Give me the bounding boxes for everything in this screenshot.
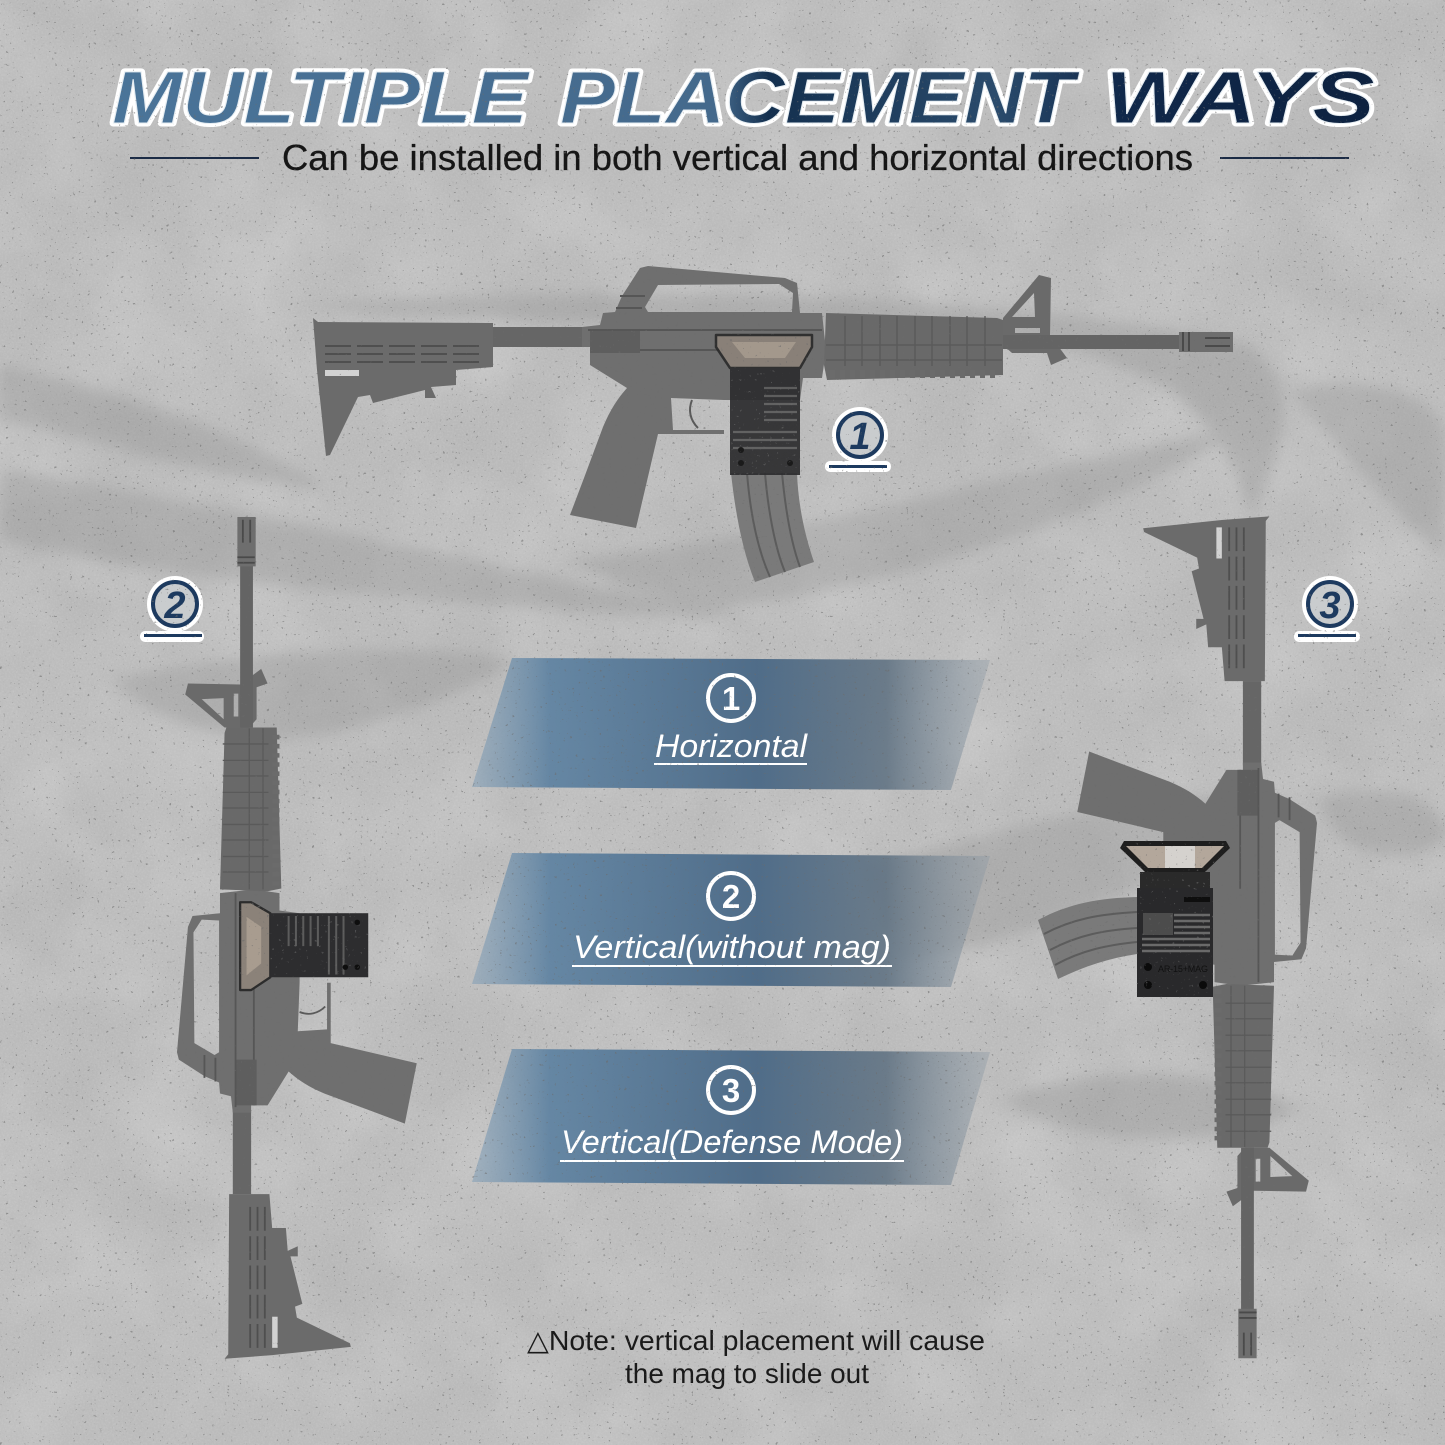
badge 3 [1294,576,1360,642]
panel: Horizontal: Horizontal [655,728,808,764]
panel: Vertical without mag: Vertical(without mag) [573,929,891,965]
panel: Horizontal [472,658,990,790]
badge 3: 3 [1319,585,1341,627]
title: WAYS [1105,56,1375,139]
title: MULTIPLE [112,56,531,139]
rifle 1: horizontal [313,266,1233,582]
badge 2 [140,576,204,642]
title: PLACEMENT [560,56,1080,139]
panel: Horizontal: 1 [722,680,740,717]
badge 2: 2 [163,585,186,627]
badge 1: 1 [849,416,871,458]
mount on rifle 3: AR-15+MAG [1158,964,1208,974]
title: MULTIPLE [112,56,531,139]
panel: Vertical Defense Mode: Vertical(Defense Mode) [561,1124,903,1160]
note: △Note: vertical placement will cause [527,1325,985,1356]
title [112,56,1375,139]
subtitle: Can be installed in both vertical and horizontal directions [282,137,1193,178]
panel: Vertical Defense Mode [472,1049,990,1185]
note [527,1325,985,1389]
rifle 3: vertical defense mode [1038,516,1317,1358]
mount on rifle 3 [1120,841,1230,997]
title: PLACEMENT [560,56,1080,139]
title: WAYS [1105,56,1375,139]
panel: Vertical without mag [472,853,990,987]
panel: Vertical without mag: 2 [722,878,740,915]
panel: Vertical Defense Mode: 3 [722,1072,740,1109]
rifle 2: vertical without mag [177,517,417,1359]
note: the mag to slide out [625,1358,869,1389]
badge 1 [825,407,891,472]
